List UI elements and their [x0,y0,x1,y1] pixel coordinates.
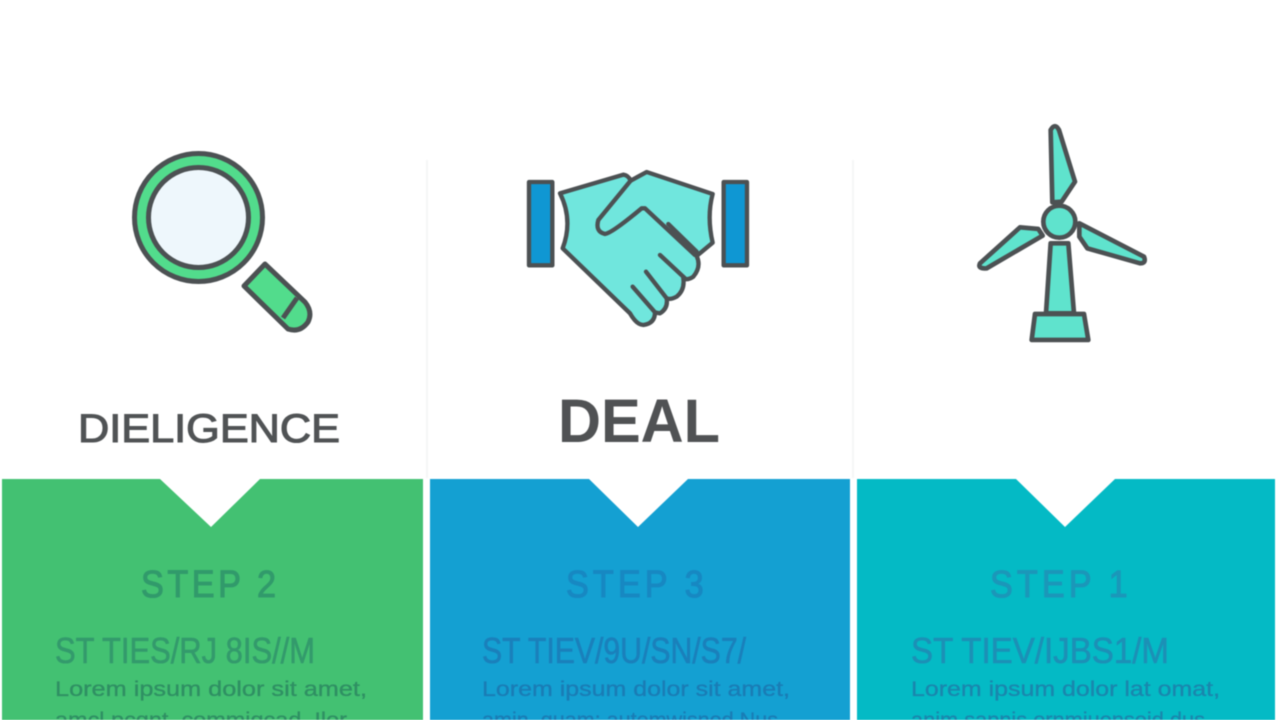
heading: deal: DEAL [558,387,720,455]
body text: step 2 [55,678,367,720]
step label: step 1: STEP 1 [990,562,1128,605]
icon: wind turbine [979,126,1145,340]
panel: step 1 [857,479,1275,720]
panel: step 2 [2,479,423,720]
body text: step 1: Lorem ipsum dolor lat omat, [911,678,1220,701]
body text: step 1 [911,678,1220,720]
step label: step 2: STEP 2 [141,562,276,605]
body text: step 2: Lorem ipsum dolor sit amet, [55,678,367,701]
body text: step 3 [482,678,790,720]
icon: magnifying glass [134,154,310,330]
body text: step 3: Lorem ipsum dolor sit amet, [482,678,790,701]
subheading: step 2: ST TIES/RJ 8IS//M [55,630,315,671]
subheading: step 1: ST TIEV/IJBS1/M [911,630,1169,671]
icon: handshake [529,172,747,325]
step label: step 3: STEP 3 [566,562,704,605]
heading: diligence: DIELIGENCE [78,407,340,451]
panel: step 3 [430,479,850,720]
subheading: step 3: ST TIEV/9U/SN/S7/ [482,630,746,671]
